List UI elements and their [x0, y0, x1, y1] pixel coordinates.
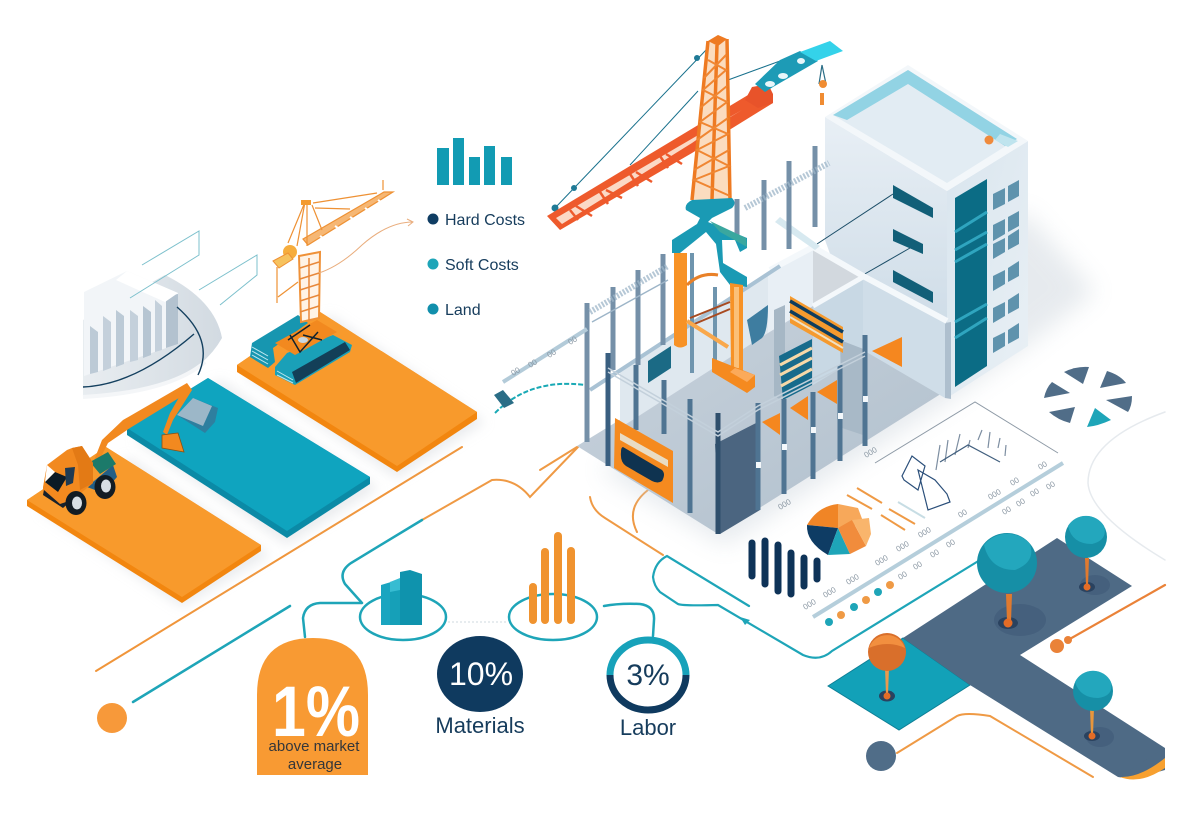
mast [692, 35, 730, 200]
L-shaped site plan with pins [828, 516, 1165, 780]
counter jib [755, 51, 818, 92]
tiny tick labels: 00 [944, 537, 957, 550]
white fins [84, 271, 178, 376]
tiny tick labels: 000 [776, 497, 793, 512]
hub [672, 198, 747, 287]
tiny tick labels [776, 445, 1057, 612]
striped banners [779, 296, 843, 400]
platform: upper orange [237, 310, 485, 478]
data panel on ground [752, 402, 1063, 626]
stat: 10% materials: 10% [449, 656, 513, 692]
stat: 10% materials: Materials [435, 713, 525, 738]
gray columns [774, 305, 785, 402]
thin outline brackets [130, 231, 257, 305]
stat card: 1% above market average: 1% [272, 673, 360, 752]
site path left of fence [494, 334, 585, 413]
legend [428, 212, 525, 319]
end dot: orange [1050, 636, 1072, 653]
callout lines [817, 194, 910, 275]
interior left wall [620, 273, 768, 428]
dot row [825, 581, 894, 626]
tiny tick labels: 00 [1000, 504, 1013, 517]
node: teal building bars [360, 570, 446, 640]
tower left wall [825, 117, 947, 398]
mast [299, 252, 320, 322]
tower windows [993, 180, 1019, 353]
tiny tick labels: 00 [1014, 496, 1027, 509]
orange dashes [847, 488, 915, 530]
stat: 3% labor: 3% [626, 659, 670, 692]
pin: large teal tree [977, 533, 1046, 636]
building site [503, 65, 1095, 545]
orange triangles [762, 337, 902, 435]
connector lines network [96, 412, 1165, 777]
platform: lower orange [27, 447, 270, 607]
node: orange bars [509, 536, 597, 640]
tiny tick labels: 00 [1008, 475, 1021, 488]
orange legs [674, 253, 687, 348]
stat: 3% labor [610, 640, 686, 740]
slate path [903, 538, 1165, 778]
pin: orange tree [868, 633, 906, 702]
legend: hard costs: Hard Costs [445, 212, 525, 229]
tower right wall [947, 141, 1028, 398]
lower wing [768, 249, 813, 333]
arm [93, 383, 192, 465]
body [87, 465, 117, 493]
tiny tick labels: 00 [1028, 486, 1041, 499]
jib [547, 92, 773, 230]
dotted link between nodes [448, 621, 508, 623]
tiny tick labels: 000 [874, 553, 890, 568]
tiny tick labels: 00 [956, 507, 969, 520]
platform: teal [127, 378, 378, 545]
jib cables [555, 49, 780, 208]
dumpster [177, 398, 218, 433]
wall plates [893, 185, 933, 303]
gray fan graphic [83, 271, 222, 397]
site path left of fence: 00 [510, 365, 522, 378]
front posts [608, 335, 865, 534]
tiny tick labels: 000 [986, 487, 1003, 502]
stat: 3% labor: Labor [620, 715, 676, 740]
main tower crane [547, 35, 843, 393]
navy bar chart [752, 541, 817, 594]
tower roof [825, 65, 1028, 191]
legend: land: Land [445, 302, 481, 319]
hook [819, 65, 826, 84]
tiny tick labels: 00 [1036, 459, 1049, 472]
wireframe sketches [902, 430, 1006, 510]
bucket [162, 433, 184, 452]
orange sign [614, 418, 673, 503]
back posts [587, 146, 815, 442]
site path left of fence: 00 [546, 347, 558, 360]
front wires [608, 352, 865, 436]
jib and head [303, 192, 393, 245]
tiny tick labels: 00 [912, 559, 924, 572]
stat card: 1% above market average [257, 638, 368, 775]
tiny tick labels: 00 [896, 569, 909, 582]
floor slab [577, 300, 947, 534]
tiny tick labels: 000 [862, 445, 879, 460]
tiny tick labels: 00 [1044, 479, 1057, 492]
excavator [43, 383, 218, 515]
pale band [813, 463, 1063, 617]
dark panel [715, 422, 760, 534]
shadow [600, 210, 1095, 545]
site path left of fence: 00 [526, 357, 539, 370]
end dot: slate [866, 741, 896, 771]
tiny tick labels: 000 [894, 539, 911, 554]
teal plot [828, 638, 970, 730]
back wires [590, 163, 829, 322]
stat card: 1% above market average: average [288, 756, 342, 773]
pie chart [807, 504, 871, 555]
tiny tick labels: 000 [822, 585, 838, 600]
legend: soft costs: Soft Costs [445, 257, 519, 274]
panel outline [875, 402, 1058, 463]
tiny tick labels: 000 [802, 597, 818, 612]
site path left of fence: 00 [566, 334, 579, 347]
stat card: 1% above market average: above market [269, 738, 360, 755]
tiny tick labels: 00 [928, 547, 941, 560]
tiny tick labels: 000 [844, 572, 861, 587]
tiny tick labels: 000 [916, 525, 933, 540]
bar chart icon [437, 138, 512, 185]
icon: arrowhead on teal line [740, 617, 750, 625]
curved arrow from crane to legend [319, 219, 413, 273]
post collars [756, 396, 868, 468]
stat: 10% materials [435, 636, 525, 738]
small tower crane on crawler [250, 180, 393, 385]
pin: lower teal tree [1073, 671, 1114, 747]
crawler tracks [250, 315, 308, 368]
pin: upper teal tree [1065, 516, 1110, 595]
tower stair strip [955, 179, 987, 387]
start dot: orange [97, 703, 127, 733]
pinwheel icon [1044, 367, 1132, 427]
